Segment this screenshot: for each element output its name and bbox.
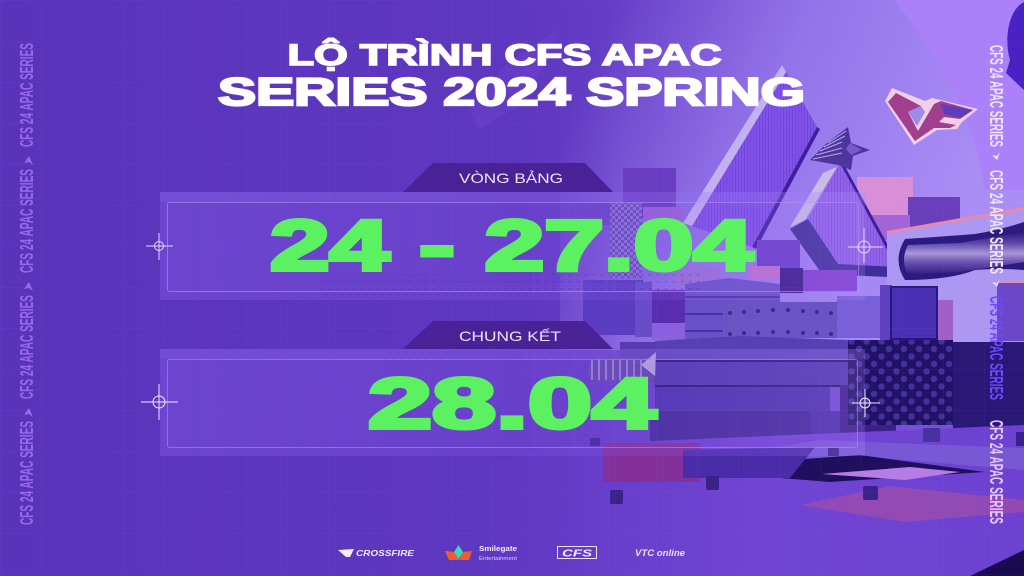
right side ticker: CFS 24 APAC SERIES <box>986 170 1006 274</box>
logo: Smilegate <box>445 544 518 562</box>
red block <box>603 443 700 482</box>
spring <box>588 352 656 382</box>
central blocks <box>583 203 1024 382</box>
light sector <box>895 0 1024 190</box>
3D scene backdrop <box>430 0 1024 576</box>
dotted plate <box>723 302 837 338</box>
icon: crosshair right <box>852 389 880 417</box>
inner frame <box>168 202 858 292</box>
footer logos <box>338 544 685 562</box>
panel: final <box>141 321 880 456</box>
dotted strip <box>380 358 650 448</box>
ghost star behind title <box>470 28 560 130</box>
tab label: CHUNG KẾT <box>459 328 562 344</box>
icon: star <box>810 127 870 170</box>
logo: CFS: CFS <box>562 548 592 560</box>
title line 1: LỘ TRÌNH CFS APAC <box>288 38 722 72</box>
dark-framed box <box>891 287 937 339</box>
dark wall <box>953 342 1024 430</box>
left side ticker <box>17 43 37 525</box>
right side ticker <box>986 45 1006 524</box>
back blocks <box>570 168 960 240</box>
inner frame <box>168 360 858 448</box>
large triangle <box>683 65 820 249</box>
logo: Crossfire: CROSSFIRE <box>356 549 415 558</box>
small triangle and star <box>790 127 900 277</box>
logo: Smilegate: Smilegate <box>479 544 517 553</box>
stacked steps <box>650 336 896 443</box>
date: 24 - 27.04 <box>270 207 754 286</box>
quilted panel <box>848 340 953 425</box>
logo: CFS <box>558 546 596 560</box>
tab: group stage <box>403 163 613 192</box>
panel background <box>160 349 865 456</box>
left side ticker: CFS 24 APAC SERIES <box>17 295 37 399</box>
icon: crosshair left <box>146 233 173 260</box>
bolts <box>590 428 1024 504</box>
date: 28.04 <box>368 365 657 444</box>
panel: group stage <box>146 163 883 300</box>
CF logo <box>885 88 978 145</box>
left side ticker: CFS 24 APAC SERIES <box>17 169 37 273</box>
title <box>218 38 805 114</box>
tab label: VÒNG BẢNG <box>459 170 563 186</box>
logo: Smilegate: Entertainment <box>479 556 518 562</box>
sky <box>560 0 1024 350</box>
logo: VTC Online: VTC online <box>635 548 685 558</box>
floor <box>430 425 1024 576</box>
icon: crosshair right <box>848 228 883 263</box>
right white ledge <box>887 208 1024 342</box>
fade into left side <box>430 0 620 576</box>
panel background <box>160 192 865 300</box>
right side ticker: CFS 24 APAC SERIES <box>986 45 1006 147</box>
stacked plates <box>685 278 780 340</box>
title line 2: SERIES 2024 SPRING <box>218 71 805 114</box>
top band <box>160 192 865 202</box>
floor checker <box>685 440 1024 470</box>
right side ticker: CFS 24 APAC SERIES <box>986 296 1006 400</box>
logo: Crossfire <box>338 549 415 558</box>
icon: crosshair left <box>141 384 178 420</box>
top right purple ornament <box>1006 2 1024 90</box>
top band <box>160 349 865 359</box>
left side ticker: CFS 24 APAC SERIES <box>17 421 37 525</box>
dotted strip <box>320 272 700 294</box>
tab: final <box>403 321 613 349</box>
pipe <box>898 222 1024 280</box>
